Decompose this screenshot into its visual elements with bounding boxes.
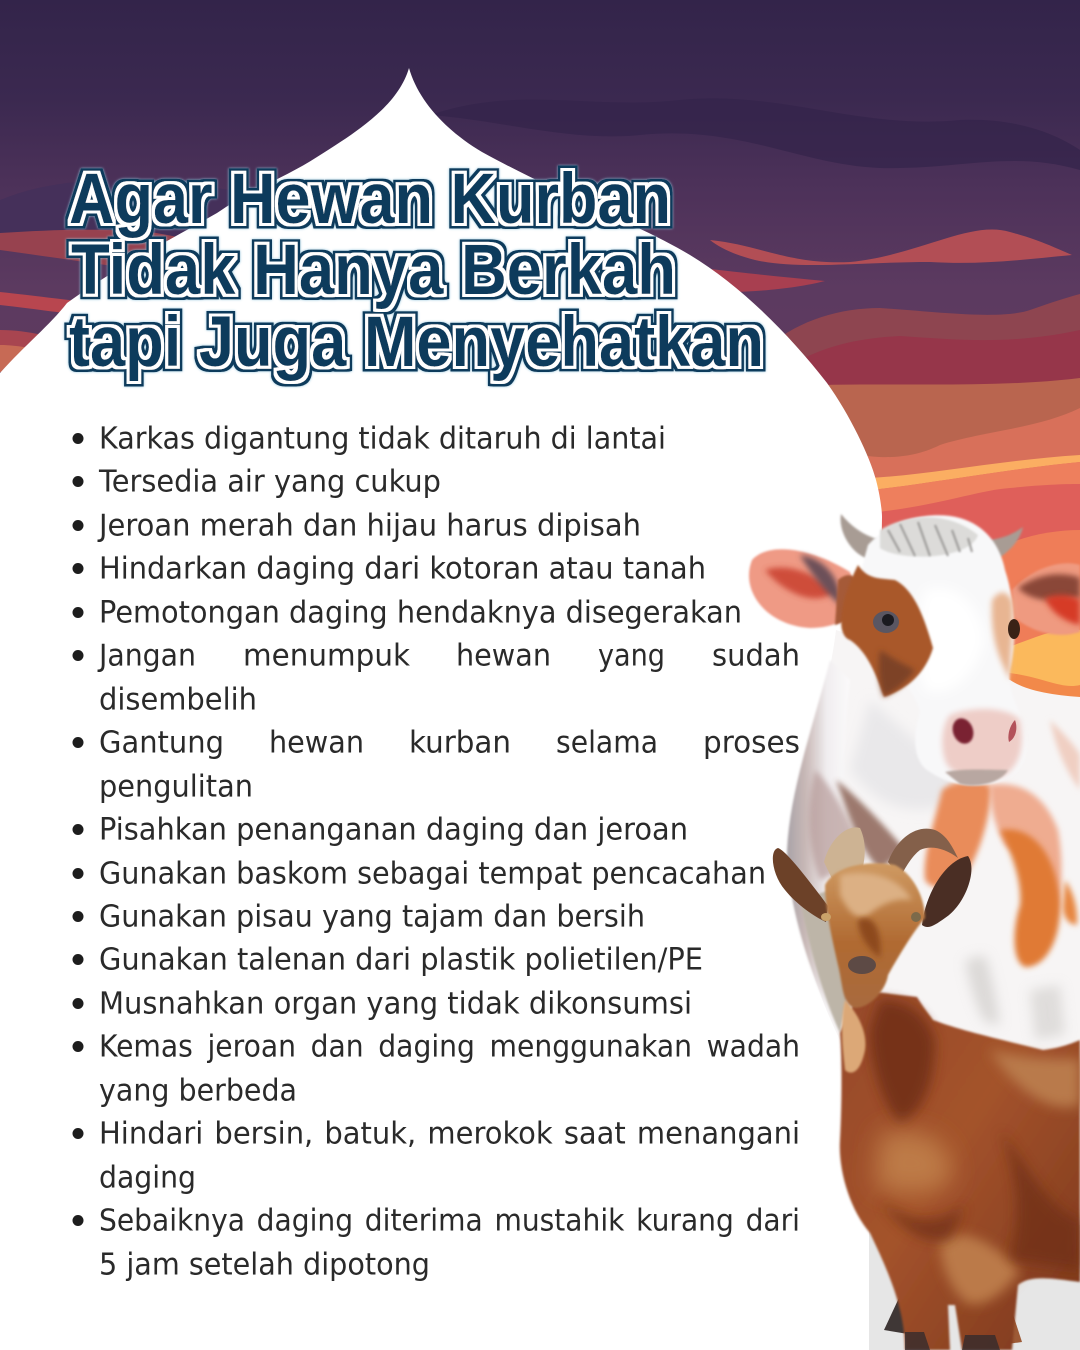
tips bullet list: Hindari bersin, batuk, merokok saat menangani [99,1116,800,1152]
tips bullet list: sudah [712,638,800,674]
goat neck shading [870,1000,935,1125]
tips bullet list: Gunakan pisau yang tajam dan bersih [99,900,645,934]
cow muzzle [942,709,1022,780]
tips bullet list: disembelih [99,682,257,718]
goat eyes [821,913,831,921]
cow horns [841,514,1023,560]
goat left horn [824,827,865,885]
bullet markers [72,433,84,1226]
goat right ear [922,856,971,927]
tips bullet list: daging [99,1160,196,1196]
tips bullet list: Kemas jeroan dan daging menggunakan wadah [99,1030,800,1064]
tips bullet list: yang [598,638,665,674]
tips bullet list: Pisahkan penanganan daging dan jeroan [99,812,688,848]
goat left ear [773,848,828,922]
cow head [841,515,1027,785]
goat chest fur highlight [875,1131,952,1193]
tips bullet list: pengulitan [99,770,253,804]
tips bullet list: Sebaiknya daging diterima mustahik kurang dari [99,1204,800,1238]
goat far legs [884,1285,1022,1345]
title: tapi Juga Menyehatkan [69,303,764,382]
illustration: cow [749,514,1080,1090]
illustration: goat [773,827,1080,1350]
tips bullet list: yang berbeda [99,1074,297,1108]
title: Agar Hewan Kurban [69,160,671,239]
goat nose [848,956,876,974]
tips bullet list: Jeroan merah dan hijau harus dipisah [97,508,641,544]
tips bullet list: Hindarkan daging dari kotoran atau tanah [99,552,706,586]
goat ground panel [869,1225,1080,1350]
tips bullet list: Tersedia air yang cukup [98,464,441,500]
tips bullet list: Gunakan talenan dari plastik polietilen/PE [99,942,703,978]
cow eyes [873,611,899,633]
cow brown face patch [841,565,933,697]
title [69,160,764,382]
tips bullet list: Musnahkan organ yang tidak dikonsumsi [99,986,692,1022]
tips bullet list: Gunakan baskom sebagai tempat pencacahan [99,856,766,892]
tips bullet list: kurban [409,726,511,760]
tips bullet list: 5 jam setelah dipotong [99,1248,430,1282]
tips bullet list: Karkas digantung tidak ditaruh di lantai [99,422,666,456]
cow right ear [1012,563,1080,635]
goat beard [842,1000,865,1073]
goat head [825,863,925,1008]
tips bullet list: hewan [269,726,364,760]
sunset wave background [0,0,1080,760]
cow chest orange markings [925,781,992,887]
cow body [787,630,1080,1090]
goat body [840,990,1080,1350]
title: Tidak Hanya Berkah [71,231,676,310]
tips bullet list: Jangan [97,638,196,674]
goat right horn [888,829,958,878]
tips bullet list [72,422,800,1282]
tips bullet list: hewan [456,638,551,674]
tips bullet list: selama [556,726,658,760]
tips bullet list: proses [703,726,800,760]
tips bullet list: menumpuk [243,638,411,674]
white mosque dome panel [0,68,882,1350]
cow left ear [749,549,860,628]
tips bullet list: Gantung [99,726,224,760]
tips bullet list: Pemotongan daging hendaknya disegerakan [99,596,742,630]
